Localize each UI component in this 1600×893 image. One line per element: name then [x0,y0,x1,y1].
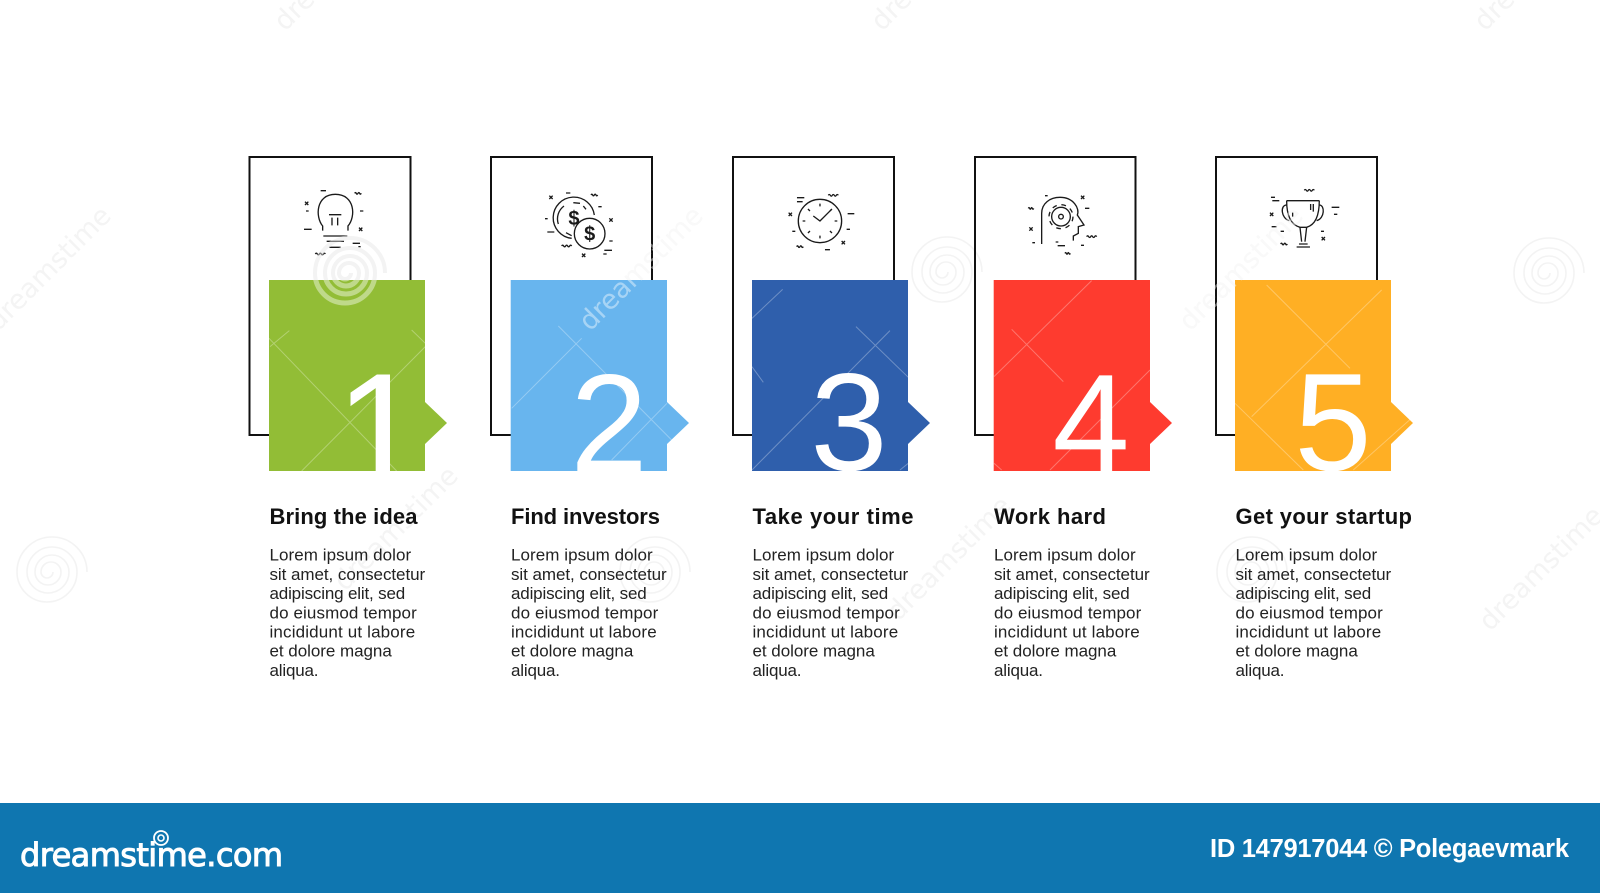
tile 1 with arrow [269,280,447,471]
description 3 [752,546,909,680]
description 4: incididunt ut labore [994,623,1140,642]
background watermark [0,0,1600,637]
footer bar [0,803,1600,893]
description 3: do eiusmod tempor [752,603,900,622]
description 5: incididunt ut labore [1236,623,1381,642]
watermark overlay on tiles: dreamstime [573,200,710,337]
footer logo: dreamstime.com [20,836,283,874]
icon: coins: $ [568,208,580,230]
description 1: adipiscing elit, sed [270,584,405,603]
description 3: Lorem ipsum dolor [752,546,895,565]
description 1: sit amet, consectetur [270,565,426,584]
background watermark: dreamstime [573,200,710,337]
outline frame 5 [1216,157,1377,435]
description 1: Lorem ipsum dolor [270,546,412,565]
description 5: Lorem ipsum dolor [1236,546,1378,565]
outline frame 1 [250,157,410,435]
description 2: aliqua. [511,661,560,680]
description 4: aliqua. [994,661,1043,680]
heading 4: Work hard [994,504,1106,529]
heading 5: Get your startup [1236,504,1412,529]
description 3: adipiscing elit, sed [752,584,888,603]
description 3: aliqua. [752,661,802,680]
heading 1: Bring the idea [270,504,418,529]
number 3: 3 [810,345,888,500]
description 4: do eiusmod tempor [994,603,1142,622]
number 5: 5 [1294,345,1372,500]
icon: clock [789,194,854,250]
description 4: adipiscing elit, sed [994,584,1130,603]
description 2 [511,546,667,680]
description 4: sit amet, consectetur [994,565,1150,584]
description 1: incididunt ut labore [270,623,415,642]
description 2: et dolore magna [511,642,634,661]
description 4: et dolore magna [994,642,1117,661]
panel: step 2 [491,157,689,680]
panel: step 4 [975,157,1172,680]
outline frame 4 [975,157,1136,435]
description 2: do eiusmod tempor [511,603,659,622]
description 2: Lorem ipsum dolor [511,546,653,565]
description 1: et dolore magna [270,642,392,661]
watermark overlay on tiles [269,200,1413,471]
description 5: et dolore magna [1236,642,1358,661]
background watermark: dreamstime [328,460,465,597]
description 2: sit amet, consectetur [511,565,667,584]
description 4 [994,546,1150,680]
panel: step 5 [1216,157,1413,680]
icon: trophy [1270,189,1339,247]
description 5: do eiusmod tempor [1236,603,1383,622]
icon: coins [545,193,613,257]
description 2: adipiscing elit, sed [511,584,647,603]
description 5: sit amet, consectetur [1236,565,1392,584]
description 2: incididunt ut labore [511,623,657,642]
panel: step 1 [250,157,447,680]
tile 3 with arrow [752,280,930,471]
outline frame 3 [733,157,894,435]
panel: step 3 [733,157,930,680]
description 1: aliqua. [270,661,318,680]
tile 5 with arrow [1235,280,1413,471]
tile 2 with arrow [511,280,689,471]
watermark overlay on tiles: dreamstime [1173,200,1310,337]
description 5 [1236,546,1392,680]
description 4: Lorem ipsum dolor [994,546,1136,565]
description 3: sit amet, consectetur [752,565,909,584]
icon: head with gear [1028,196,1097,254]
background watermark: dreamstime [1173,200,1310,337]
description 3: et dolore magna [752,642,875,661]
icon: light bulb [304,191,363,255]
outline frame 2 [491,157,652,435]
number 2: 2 [570,346,648,501]
icon: coins: $ [584,223,595,245]
number 1: 1 [335,340,425,521]
heading 3: Take your time [752,504,914,529]
description 5: aliqua. [1236,661,1284,680]
heading 2: Find investors [511,504,660,529]
description 3: incididunt ut labore [752,623,898,642]
number 4: 4 [1052,346,1130,501]
description 1: do eiusmod tempor [270,603,417,622]
description 5: adipiscing elit, sed [1236,584,1371,603]
footer credit: ID 147917044 © Polegaevmark [1210,835,1570,863]
tile 4 with arrow [994,280,1172,471]
description 1 [270,546,426,680]
background watermark: dreamstime [881,490,1018,627]
